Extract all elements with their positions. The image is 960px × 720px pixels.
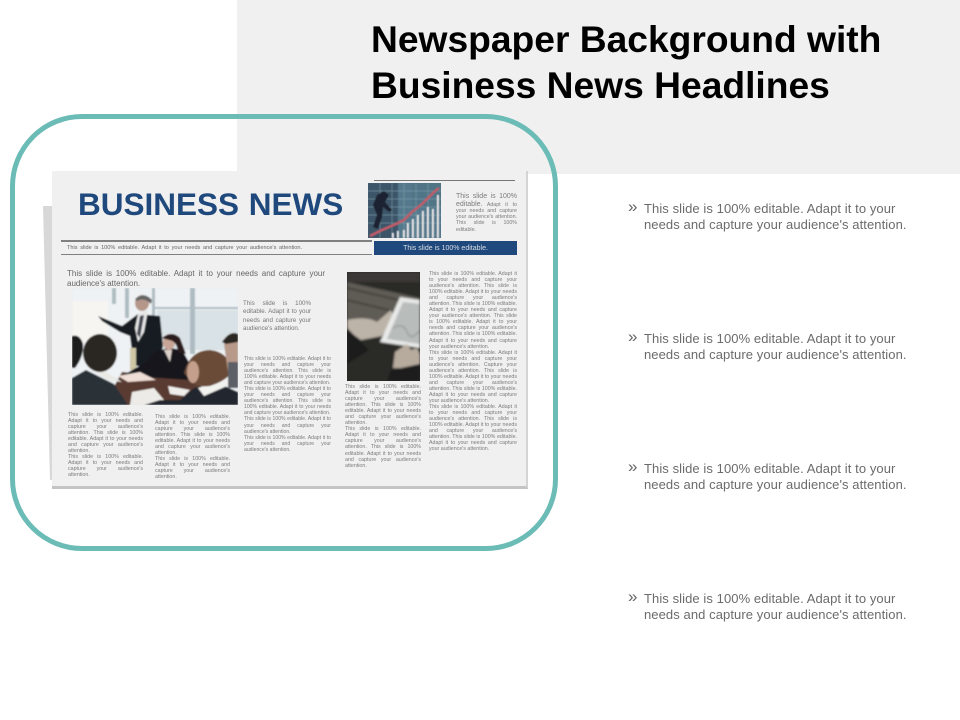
chart side text: This slide is 100% editable. Adapt it to your needs and capture your audience's attention. This slide is 100% editable. (456, 193, 517, 233)
photo caption: This slide is 100% editable. Adapt it to your needs and capture your audience's attention. (243, 300, 311, 332)
title: Business News Headlines (371, 64, 830, 106)
column text center: This slide is 100% editable. Adapt it to your needs and capture your audience's attention. (244, 416, 331, 435)
column text left one: This slide is 100% editable. Adapt it to your needs and capture your audience's attention. This slide is 100% editable. Adapt it to your needs and capture your audience's attention. (68, 412, 143, 454)
list item 2: needs and capture your audience's attention. (644, 347, 907, 362)
column text right (429, 271, 517, 452)
list item 3 (628, 457, 907, 492)
rule above chart (374, 180, 515, 181)
list item 1: This slide is 100% editable. Adapt it to your (644, 201, 895, 216)
teal rounded frame (10, 114, 558, 551)
column text center: This slide is 100% editable. Adapt it to your needs and capture your audience's attention. This slide is 100% editable. Adapt it to your needs and capture your audience's attention. (244, 386, 331, 416)
column text right: This slide is 100% editable. Adapt it to your needs and capture your audience's attention. This slide is 100% editable. Adapt it to your needs and capture your audience's attention. This slide is 100% editable. Adapt it to your needs and capture your audience's attention. This slide is 100% editable. Adapt it to your needs and capture your audience's attention. This slide is 100% editable. Adapt it to your needs and capture your audience's attention. (429, 271, 517, 350)
list item 4: needs and capture your audience's attention. (644, 607, 907, 622)
strapline rules and text (61, 240, 372, 255)
strapline text: This slide is 100% editable. Adapt it to your needs and capture your audience's attention. (67, 245, 302, 251)
column text under tablet (345, 384, 421, 469)
column text center: This slide is 100% editable. Adapt it to your needs and capture your audience's attention. (244, 435, 331, 453)
blue banner: This slide is 100% editable. (403, 245, 488, 252)
lead headline: This slide is 100% editable. Adapt it to your needs and capture your audience's attention. (67, 269, 325, 288)
list item 3: » (628, 457, 637, 476)
back newspaper sheet (43, 206, 52, 480)
list item 2 (628, 327, 907, 362)
column text right: This slide is 100% editable. Adapt it to your needs and capture your audience's attention. Capture your audience's attention. This slide is 100% editable. Adapt it to your needs and capture your audience's attention. This slide is 100% editable. Adapt it to your needs and capture your audience's attention. (429, 350, 517, 404)
newspaper (52, 171, 528, 489)
newspaper masthead: BUSINESS NEWS (78, 186, 343, 222)
list item 1: needs and capture your audience's attention. (644, 217, 907, 232)
tablet photo (347, 272, 420, 381)
list item 2: This slide is 100% editable. Adapt it to your (644, 331, 895, 346)
title band (237, 0, 960, 174)
list item 3: needs and capture your audience's attention. (644, 477, 907, 492)
column text under tablet: This slide is 100% editable. Adapt it to your needs and capture your audience's attention. This slide is 100% editable. Adapt it to your needs and capture your audience's attention. (345, 384, 421, 426)
title (371, 18, 881, 106)
list item 3: This slide is 100% editable. Adapt it to your (644, 461, 895, 476)
column text left one (68, 412, 143, 478)
title: Newspaper Background with (371, 18, 881, 60)
column text left one: This slide is 100% editable. Adapt it to your needs and capture your audience's attention. (68, 454, 143, 478)
newspaper page (52, 171, 528, 489)
blue banner (374, 241, 517, 255)
column text right: This slide is 100% editable. Adapt it to your needs and capture your audience's attention. This slide is 100% editable. Adapt it to your needs and capture your audience's attention. This slide is 100% editable. Adapt it to your needs and capture your audience's attention. (429, 404, 517, 452)
meeting photo (72, 288, 238, 405)
list item 2: » (628, 327, 637, 346)
list item 1: » (628, 197, 637, 216)
list item 1 (628, 197, 907, 232)
column text left two: This slide is 100% editable. Adapt it to your needs and capture your audience's attention. (155, 456, 230, 480)
column text center (244, 356, 331, 453)
column text left two (155, 414, 230, 480)
list item 4 (628, 587, 907, 622)
list item 4: This slide is 100% editable. Adapt it to your (644, 591, 895, 606)
chart photo (368, 183, 441, 238)
column text under tablet: This slide is 100% editable. Adapt it to your needs and capture your audience's attention. This slide is 100% editable. Adapt it to your needs and capture your audience's attention. (345, 426, 421, 469)
list item 4: » (628, 587, 637, 606)
column text center: This slide is 100% editable. Adapt it to your needs and capture your audience's attention. This slide is 100% editable. Adapt it to your needs and capture your audience's attention. (244, 356, 331, 386)
column text left two: This slide is 100% editable. Adapt it to your needs and capture your audience's attention. This slide is 100% editable. Adapt it to your needs and capture your audience's attention. (155, 414, 230, 456)
